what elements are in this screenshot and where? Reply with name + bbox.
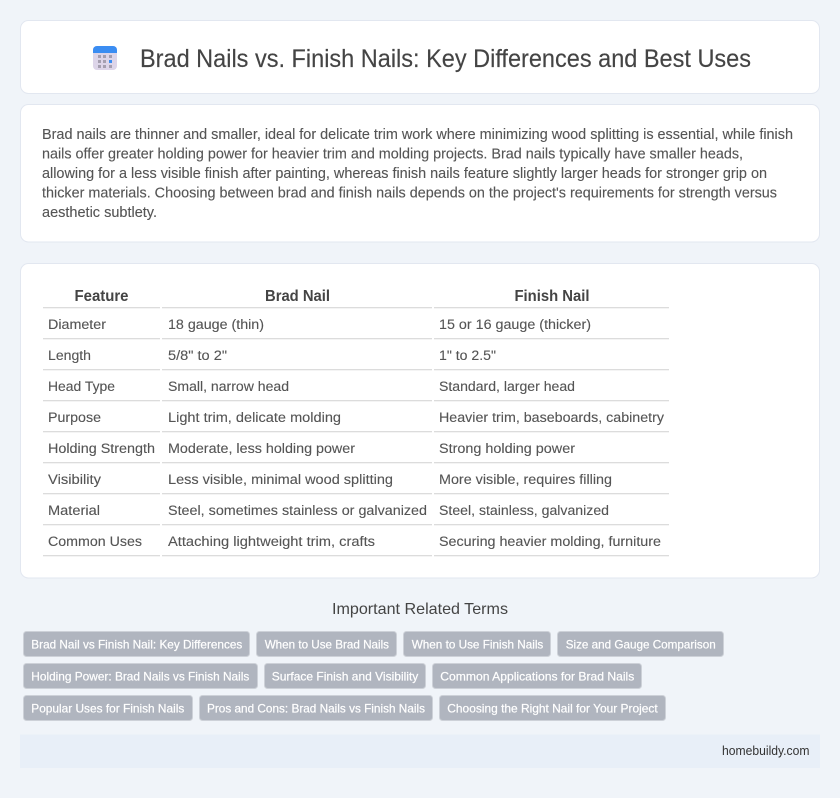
tag: Pros and Cons: Brad Nails vs Finish Nails <box>207 701 425 715</box>
table header row: Feature <box>74 288 129 305</box>
table row: holding strength: Holding Strength <box>48 440 155 456</box>
table row: purpose: Purpose <box>48 409 101 425</box>
tag <box>558 632 724 656</box>
table row: material <box>48 502 609 518</box>
table row: holding strength: Strong holding power <box>439 440 575 456</box>
tag <box>24 696 192 720</box>
table row: diameter: 18 gauge (thin) <box>168 316 264 332</box>
heading: important related terms: Important Related Terms <box>332 601 508 618</box>
table row: holding strength: Moderate, less holding power <box>168 440 355 456</box>
text block: introduction paragraph <box>42 127 793 221</box>
table row: length <box>48 347 496 363</box>
table row: length: 1" to 2.5" <box>439 347 496 363</box>
table row: diameter <box>48 316 591 332</box>
table row: purpose: Heavier trim, baseboards, cabinetry <box>439 409 665 425</box>
tag: Surface Finish and Visibility <box>272 669 418 683</box>
table row: visibility: Less visible, minimal wood splitting <box>168 471 393 487</box>
panel: introduction <box>20 104 820 242</box>
footer <box>20 734 820 768</box>
tag <box>432 664 642 688</box>
table row: common uses: Securing heavier molding, furniture <box>439 533 661 549</box>
table row: common uses: Attaching lightweight trim, crafts <box>168 533 375 549</box>
tag <box>200 696 432 720</box>
panel: related term tags <box>24 632 724 720</box>
table row: visibility: Visibility <box>48 471 102 487</box>
table row: visibility: More visible, requires filling <box>439 471 612 487</box>
table row: visibility <box>48 471 612 487</box>
table row: purpose <box>48 409 665 425</box>
tag: When to Use Brad Nails <box>265 637 389 651</box>
table row: head type <box>48 378 575 394</box>
table row: holding strength <box>48 440 575 456</box>
title: Brad Nails vs. Finish Nails: Key Differences and Best Uses <box>140 45 751 73</box>
tag <box>256 632 396 656</box>
table row: common uses <box>48 533 661 549</box>
footer: homebuildy.com <box>722 743 810 758</box>
table row: head type: Standard, larger head <box>439 378 575 394</box>
tag: Brad Nail vs Finish Nail: Key Differences <box>31 637 242 651</box>
table row: material: Steel, sometimes stainless or galvanized <box>168 502 427 518</box>
tag: Common Applications for Brad Nails <box>440 669 634 683</box>
tag: Holding Power: Brad Nails vs Finish Nails <box>31 669 249 683</box>
text block: introduction paragraph: Brad nails are thinner and smaller, ideal for delicate trim work where minimizing wood splitting is essential, while finish <box>42 127 793 143</box>
table row: common uses: Common Uses <box>48 533 142 549</box>
tag: Choosing the Right Nail for Your Project <box>447 701 658 715</box>
panel: title header <box>20 20 820 94</box>
tag <box>264 664 426 688</box>
tag <box>404 632 550 656</box>
table row: material: Material <box>48 502 100 518</box>
table header row: Finish Nail <box>514 288 590 305</box>
tag: Size and Gauge Comparison <box>566 637 716 651</box>
table row: diameter: 15 or 16 gauge (thicker) <box>439 316 591 332</box>
tag <box>24 632 250 656</box>
table row: length: Length <box>48 347 91 363</box>
text block: introduction paragraph: aesthetic subtlety. <box>42 205 157 221</box>
text block: introduction paragraph: allowing for a less visible finish after painting, whereas finish nails feature slightly larger heads for stronger grip on <box>42 166 767 182</box>
table row: material: Steel, stainless, galvanized <box>439 502 609 518</box>
table row: diameter: Diameter <box>48 316 106 332</box>
text block: introduction paragraph: nails offer greater holding power for heavier trim and molding projects. Brad nails typically have smaller heads, <box>42 146 743 162</box>
table header row: Brad Nail <box>265 288 330 305</box>
text block: introduction paragraph: thicker materials. Choosing between brad and finish nails depends on the project's requirements for strength versus <box>42 186 777 202</box>
table header row <box>74 288 590 305</box>
tag: When to Use Finish Nails <box>412 637 543 651</box>
table row: purpose: Light trim, delicate molding <box>168 409 341 425</box>
table row: length: 5/8" to 2" <box>168 347 227 363</box>
tag <box>24 664 258 688</box>
table row: head type: Head Type <box>48 378 115 394</box>
icon: calendar <box>93 46 117 70</box>
tag: Popular Uses for Finish Nails <box>31 701 184 715</box>
tag <box>440 696 666 720</box>
table row: head type: Small, narrow head <box>168 378 289 394</box>
panel: comparison table <box>20 264 820 578</box>
